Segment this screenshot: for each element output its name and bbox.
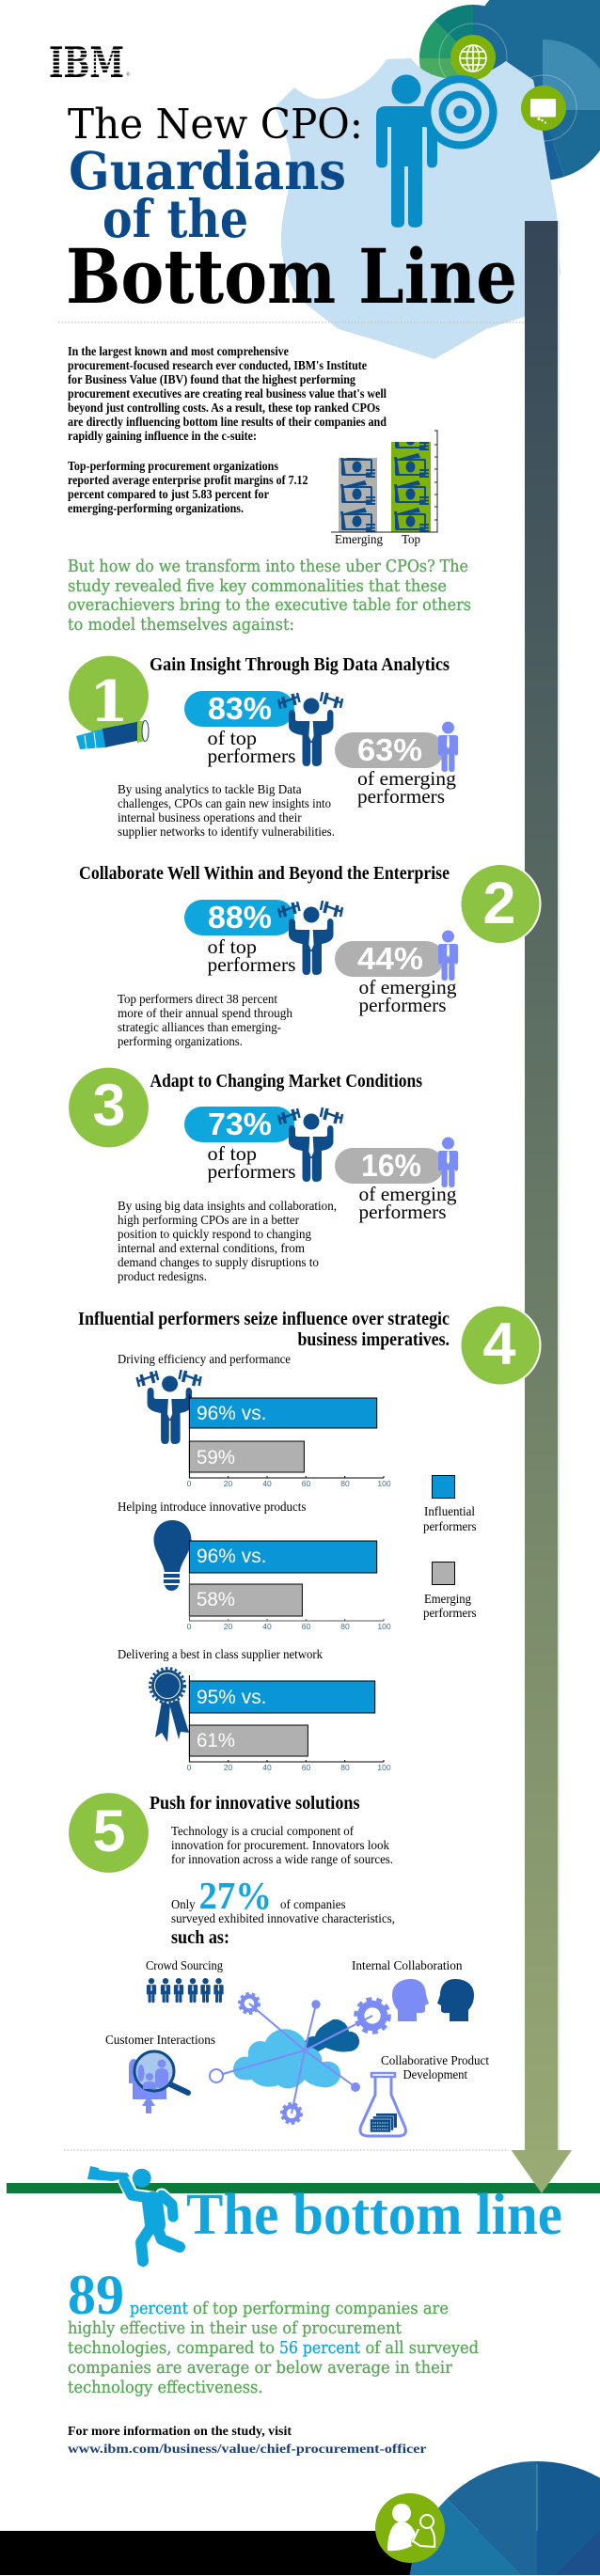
bottom line statistics: companies are average or below average in their — [68, 2358, 452, 2378]
stat: top performers: performers — [207, 1160, 295, 1183]
bottom line statistics: of all surveyed — [365, 2338, 479, 2358]
intro paragraph: beyond just controlling costs. As a result, these top ranked CPOs — [68, 401, 380, 415]
bar chart: supplier network: 60 — [302, 1763, 310, 1772]
bar chart: innovative products: 96% vs. — [197, 1546, 267, 1567]
stat: top performers: of top — [207, 935, 257, 958]
stat: emerging performers: 44% — [357, 941, 423, 976]
number badge 3 — [69, 1068, 149, 1147]
number badge 4 — [461, 1305, 540, 1386]
intro paragraph: for Business Value (IBV) found that the highest performing — [68, 372, 355, 386]
heading: Adapt to Changing Market Conditions — [150, 1071, 422, 1092]
bottom line statistics: technologies, compared to — [68, 2338, 275, 2358]
intro paragraph: procurement-focused research ever conducted, IBM's Institute — [68, 358, 367, 372]
intro paragraph: In the largest known and most comprehensive — [68, 344, 289, 358]
stat: top performers: performers — [207, 953, 295, 976]
number badge 1 — [69, 656, 149, 735]
light blue shield — [276, 58, 561, 359]
stat: emerging performers: 16% — [361, 1148, 421, 1183]
green intro question: overachievers bring to the executive table for others — [68, 595, 471, 615]
heading: Gain Insight Through Big Data Analytics — [150, 654, 450, 675]
bar chart: supplier network: Delivering a best in class supplier network — [118, 1648, 323, 1662]
panel: section 2 — [79, 863, 540, 1048]
stat: 27 percent: Only — [171, 1897, 196, 1911]
internal collaboration — [352, 1959, 474, 2021]
bar chart: driving efficiency: 59% — [197, 1447, 235, 1469]
body text: By using analytics to tackle Big Data — [118, 782, 302, 796]
bar chart: innovative products: 40 — [262, 1622, 272, 1631]
body text: demand changes to supply disruptions to — [118, 1255, 319, 1269]
heading: Influential performers seize influence over strategic — [78, 1309, 450, 1329]
bar chart: supplier network: 61% — [197, 1730, 235, 1751]
heading: Collaborate Well Within and Beyond the Enterprise — [79, 863, 450, 884]
body text: high performing CPOs are in a better — [118, 1213, 299, 1227]
green bottom line bar — [7, 2183, 600, 2193]
bar chart: driving efficiency: 60 — [302, 1479, 310, 1488]
customer interactions — [105, 2034, 215, 2113]
green intro question — [68, 557, 471, 635]
crowd sourcing — [146, 1959, 224, 2003]
number badge 1: 1 — [89, 669, 129, 735]
more information link: For more information on the study, visit — [68, 2425, 292, 2439]
heading — [78, 1309, 450, 1350]
arrow: progress down the page — [525, 221, 560, 2151]
more information link — [68, 2425, 427, 2457]
chart: profit margins pictogram — [331, 426, 437, 547]
body text — [171, 1824, 393, 1866]
stat: emerging performers: performers — [359, 1201, 446, 1223]
stat: emerging performers: of emerging — [359, 976, 457, 998]
bar chart: supplier network: 0 — [187, 1763, 192, 1772]
stat: top performers — [184, 900, 342, 976]
bottom line statistics: of top performing companies are — [193, 2299, 449, 2318]
bar chart: supplier network: 20 — [224, 1763, 232, 1772]
title: The New CPO: — [68, 101, 363, 149]
IBM logo: IBM — [49, 38, 124, 87]
stat: top performers: 83% — [208, 691, 272, 726]
stat: 27 percent: of companies — [280, 1897, 346, 1911]
title: Guardians — [69, 140, 346, 201]
stat: top performers: of top — [207, 727, 257, 749]
bar chart: driving efficiency: 100 — [377, 1479, 391, 1488]
stat: top performers: performers — [207, 745, 295, 767]
heading: Push for innovative solutions — [150, 1793, 360, 1814]
intro paragraph: rapidly gaining influence in the c-suite: — [68, 429, 257, 443]
body text: internal and external conditions, from — [118, 1241, 305, 1255]
panel: section 4 — [78, 1305, 540, 1772]
bottom line statistics: highly effective in their use of procurement — [68, 2318, 403, 2338]
icon: person — [376, 75, 437, 228]
panel: section 3 — [69, 1068, 458, 1283]
stat: emerging performers: performers — [357, 785, 445, 808]
body text: challenges, CPOs can gain new insights into — [118, 796, 331, 810]
bar chart: supplier network — [118, 1648, 391, 1772]
collaborative product development: Development — [403, 2068, 467, 2082]
internal collaboration: Internal Collaboration — [352, 1959, 463, 1973]
bar chart: supplier network: 100 — [377, 1763, 391, 1772]
stat: top performers: 73% — [208, 1107, 272, 1141]
heading: business imperatives. — [297, 1329, 450, 1350]
body text: supplier networks to identify vulnerabilities. — [118, 825, 335, 839]
bar chart: innovative products — [118, 1500, 391, 1631]
bar chart: driving efficiency: 20 — [224, 1479, 232, 1488]
stat: emerging performers: of emerging — [357, 767, 457, 790]
bar chart: innovative products: 58% — [197, 1589, 235, 1610]
legend: performers — [423, 1519, 476, 1533]
customer interactions: Customer Interactions — [105, 2034, 215, 2048]
body text: innovation for procurement. Innovators look — [171, 1838, 389, 1852]
body text: internal business operations and their — [118, 810, 302, 825]
body text: By using big data insights and collaboration, — [118, 1199, 337, 1213]
intro paragraph — [68, 344, 387, 443]
IBM logo: ® — [126, 71, 131, 78]
title: of the — [103, 188, 248, 249]
panel: section 5 — [69, 1793, 489, 2136]
black footer bar — [0, 2531, 600, 2575]
stat: emerging performers: performers — [359, 994, 446, 1016]
bar chart: innovative products: 60 — [302, 1622, 310, 1631]
body text: for innovation across a wide range of sources. — [171, 1852, 393, 1866]
body text — [118, 1199, 337, 1283]
icon: telescope — [76, 720, 149, 749]
bar chart: innovative products: Helping introduce innovative products — [118, 1500, 307, 1515]
bar chart: supplier network: 95% vs. — [197, 1687, 267, 1708]
chart: profit margins pictogram: Emerging — [335, 533, 383, 547]
chart: profit margins pictogram: Top — [402, 533, 420, 547]
legend: performers — [423, 1606, 476, 1620]
intro paragraph: are directly influencing bottom line results of their companies and — [68, 415, 387, 429]
bar chart: driving efficiency: 80 — [340, 1479, 350, 1488]
number badge 4: 4 — [482, 1312, 516, 1377]
body text: position to quickly respond to changing — [118, 1227, 311, 1241]
body text — [118, 782, 335, 839]
bar chart: supplier network: 80 — [340, 1763, 350, 1772]
arrow head — [512, 2150, 572, 2193]
bar chart: innovative products: 100 — [377, 1622, 391, 1631]
stat: emerging performers — [335, 1138, 458, 1223]
number badge 2: 2 — [482, 871, 516, 936]
legend: Emerging — [424, 1592, 471, 1606]
icon: target — [423, 75, 497, 149]
profit margin paragraph: Top-performing procurement organizations — [68, 459, 278, 473]
body text: Technology is a crucial component of — [171, 1824, 354, 1838]
body text: performing organizations. — [118, 1034, 243, 1048]
stat: top performers: 88% — [208, 900, 272, 935]
icon: globe bubble — [450, 35, 496, 80]
green intro question: But how do we transform into these uber CPOs? The — [68, 557, 468, 576]
legend: Influential — [424, 1504, 475, 1518]
number badge 3: 3 — [92, 1073, 126, 1139]
number badge 2 — [461, 864, 540, 944]
bar chart: driving efficiency: 0 — [187, 1479, 192, 1488]
green intro question: to model themselves against: — [68, 615, 294, 635]
body text: strategic alliances than emerging- — [118, 1020, 281, 1034]
body text: product redesigns. — [118, 1269, 207, 1283]
green intro question: study revealed five key commonalities that these — [68, 576, 447, 596]
bottom line statistics: 56 percent — [279, 2338, 361, 2358]
stat: emerging performers — [335, 722, 458, 808]
stat: top performers: of top — [207, 1142, 257, 1165]
stat: emerging performers: of emerging — [359, 1183, 457, 1205]
panel: section 1 — [69, 654, 458, 839]
number badge 5 — [69, 1793, 149, 1873]
stat: top performers — [184, 1107, 342, 1183]
crowd sourcing: Crowd Sourcing — [146, 1959, 223, 1973]
stat: 27 percent: such as: — [171, 1927, 229, 1948]
bar chart: supplier network: 40 — [262, 1763, 272, 1772]
stat: 27 percent: 27% — [199, 1874, 272, 1917]
bottom line statistics: 89 — [68, 2264, 124, 2326]
footer pie — [410, 2461, 600, 2575]
bar chart: driving efficiency — [118, 1353, 391, 1488]
icon: people badge — [375, 2493, 445, 2563]
profit margin paragraph — [68, 459, 308, 515]
more information link: www.ibm.com/business/value/chief-procurement-officer — [68, 2442, 427, 2457]
body text: more of their annual spend through — [118, 1006, 292, 1020]
icon: speech bubble — [521, 86, 566, 131]
title: Bottom Line — [66, 232, 517, 321]
bar chart: driving efficiency: 40 — [262, 1479, 272, 1488]
title — [66, 101, 517, 321]
stat: emerging performers: 63% — [357, 732, 422, 767]
stat: top performers — [184, 691, 342, 767]
profit margin paragraph: emerging-performing organizations. — [68, 501, 244, 515]
diagram: cloud network — [210, 1993, 388, 2123]
bottom line statistics: percent — [130, 2299, 189, 2318]
background shapes: top pies — [419, 0, 600, 181]
collaborative product development: Collaborative Product — [381, 2054, 489, 2068]
body text — [118, 992, 292, 1048]
stat: 27 percent — [171, 1874, 395, 1948]
bar chart: innovative products: 0 — [187, 1622, 192, 1631]
profit margin paragraph: percent compared to just 5.83 percent for — [68, 487, 269, 501]
legend — [423, 1476, 476, 1620]
collaborative product development — [360, 2054, 489, 2136]
bar chart: innovative products: 80 — [340, 1622, 350, 1631]
intro paragraph: procurement executives are creating real business value that's well — [68, 386, 387, 401]
profit margin paragraph: reported average enterprise profit margins of 7.12 — [68, 473, 308, 487]
number badge 5: 5 — [92, 1798, 126, 1864]
body text: Top performers direct 38 percent — [118, 992, 277, 1006]
heading: the bottom line: The bottom line — [186, 2183, 562, 2247]
stat: 27 percent: surveyed exhibited innovative characteristics, — [171, 1911, 395, 1925]
stat: emerging performers — [335, 931, 458, 1016]
bottom line statistics — [68, 2264, 479, 2397]
bar chart: driving efficiency: Driving efficiency and performance — [118, 1353, 291, 1367]
bottom line statistics: technology effectiveness. — [68, 2378, 263, 2397]
bar chart: driving efficiency: 96% vs. — [197, 1403, 267, 1424]
bar chart: innovative products: 20 — [224, 1622, 232, 1631]
icon: man with telescope — [87, 2166, 180, 2261]
